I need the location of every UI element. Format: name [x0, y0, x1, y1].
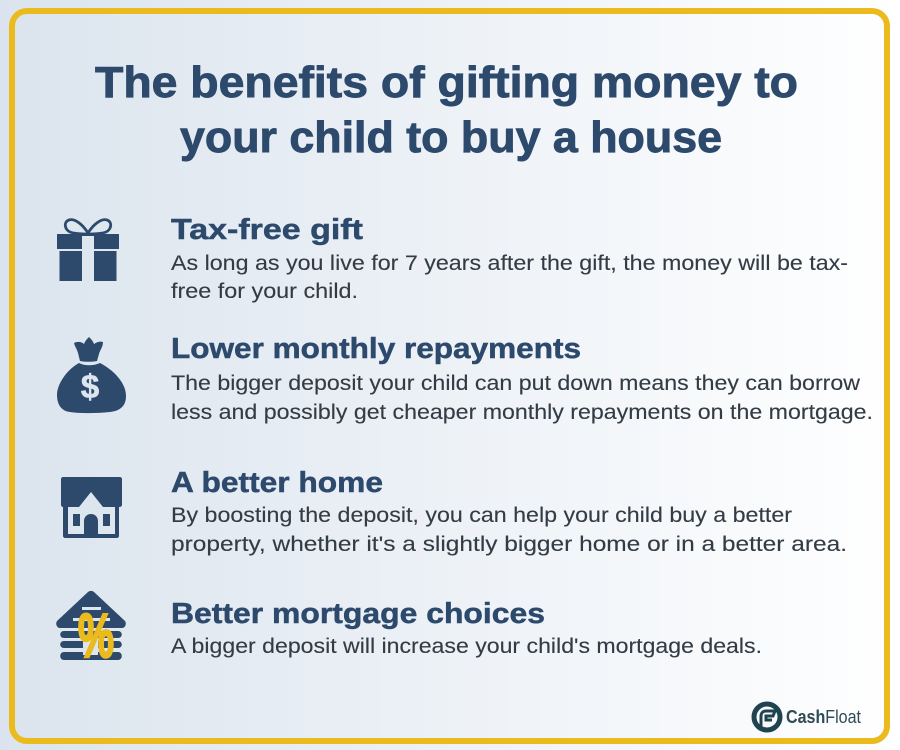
text: better mortgage choices description: A bigger deposit will increase your child's mortgage deals.: [171, 635, 762, 658]
logo: CashFloat: [754, 704, 861, 730]
logo: CashFloat: CashFloat: [786, 706, 861, 727]
heading: better mortgage choices: Better mortgage choices: [171, 598, 545, 630]
text: a better home description: [171, 504, 847, 556]
icon: log cabin with percent sign: [56, 591, 126, 671]
text: lower monthly repayments description: The bigger deposit your child can put down means they can borrow: [171, 372, 861, 395]
heading: lower monthly repayments: Lower monthly repayments: [171, 333, 581, 365]
text: tax-free gift description: As long as you live for 7 years after the gift, the money will be tax-: [171, 252, 848, 275]
text: tax-free gift description: free for your child.: [171, 280, 358, 303]
heading: a better home: A better home: [171, 467, 383, 499]
heading: tax-free gift: Tax-free gift: [171, 214, 363, 246]
icon: money bag: $: [81, 368, 99, 405]
title: [95, 58, 798, 162]
title: your child to buy a house: [180, 113, 722, 162]
icon: gift box: [57, 220, 119, 281]
icon: house: [61, 477, 122, 538]
text: a better home description: By boosting the deposit, you can help your child buy a better: [171, 504, 792, 527]
icon: log cabin with percent sign: %: [78, 602, 114, 671]
text: lower monthly repayments description: [171, 372, 873, 424]
text: tax-free gift description: [171, 252, 848, 303]
title: The benefits of gifting money to: [95, 58, 798, 107]
text: lower monthly repayments description: less and possibly get cheaper monthly repayments on the mortgage.: [171, 401, 873, 424]
icon: money bag: [57, 337, 126, 413]
text: a better home description: property, whether it's a slightly bigger home or in a better area.: [171, 533, 847, 556]
